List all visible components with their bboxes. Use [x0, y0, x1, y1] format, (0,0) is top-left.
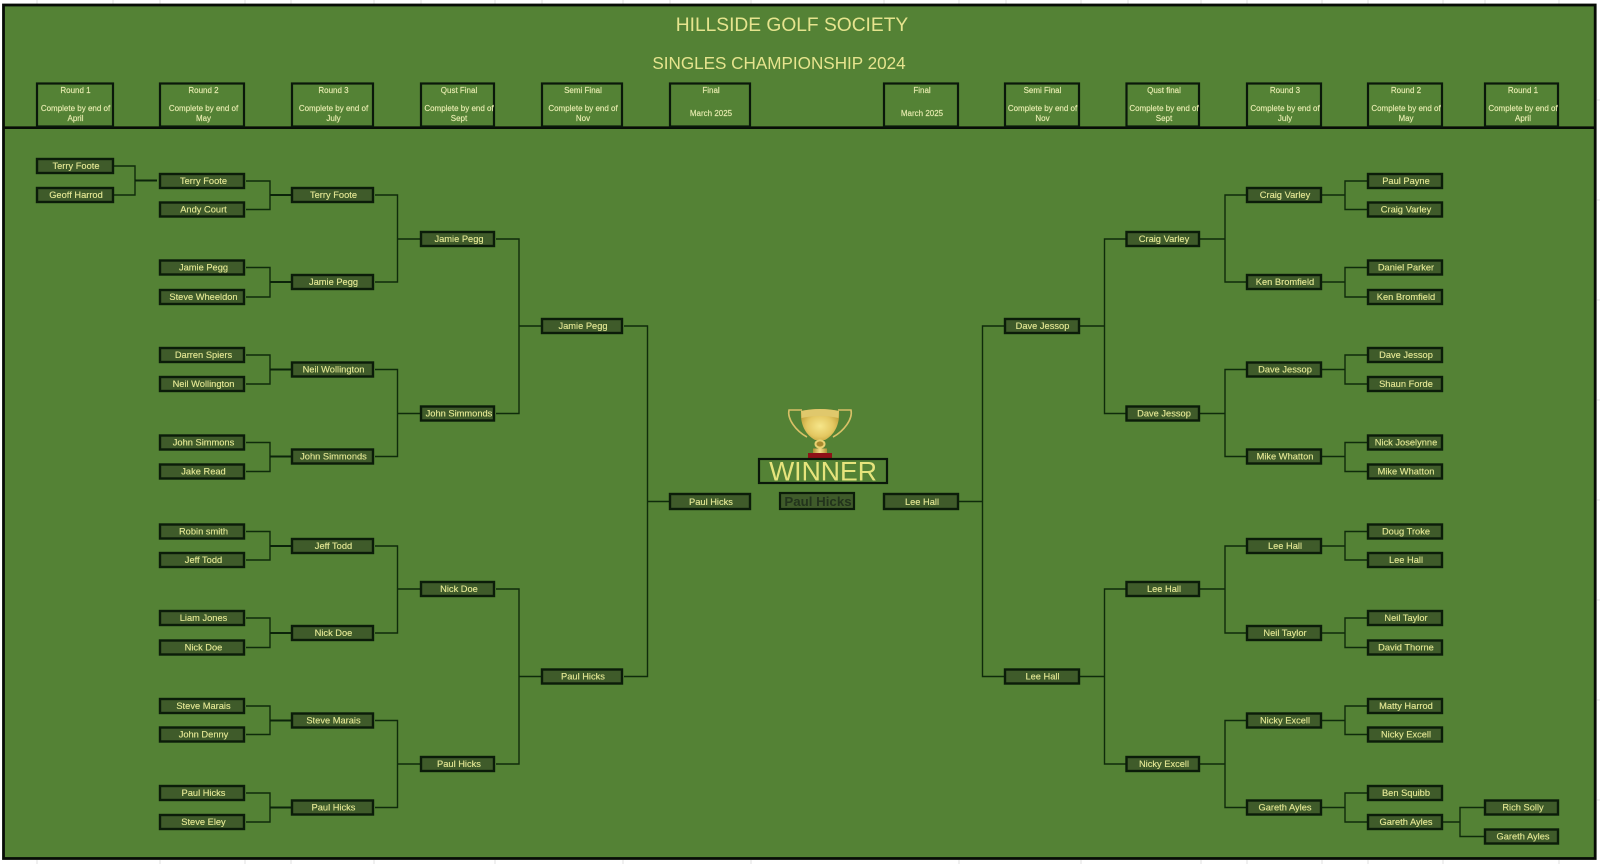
player box: [160, 786, 244, 800]
player box: Gareth Ayles: [1379, 817, 1433, 827]
right bracket: round 1: [1485, 800, 1558, 844]
player box: Andy Court: [180, 205, 227, 215]
header: left round 1: April: [67, 114, 84, 123]
player box: Dave Jessop: [1258, 365, 1312, 375]
left bracket: quarter finals: [421, 232, 494, 771]
player box: Shaun Forde: [1379, 379, 1433, 389]
player box: Steve Eley: [181, 817, 226, 827]
left bracket: round 3: [292, 188, 373, 814]
player box: Steve Marais: [176, 701, 231, 711]
header: right round 3: July: [1278, 114, 1292, 123]
header: right round 2: Complete by end of: [1371, 104, 1441, 113]
player box: [1368, 815, 1442, 829]
player box: [1368, 786, 1442, 800]
champion name box: Paul Hicks: [784, 494, 852, 509]
player box: Ken Bromfield: [1256, 277, 1314, 287]
player box: John Simmonds: [426, 409, 493, 419]
header: left round 3: Round 3: [318, 86, 349, 95]
player box: [1368, 464, 1442, 478]
player box: Neil Wollington: [303, 365, 364, 375]
right bracket: quarter finals: [1126, 232, 1199, 771]
player box: [160, 524, 244, 538]
player box: [292, 800, 373, 814]
player box: Gareth Ayles: [1258, 803, 1312, 813]
player box: [1368, 377, 1442, 391]
player box: Jamie Pegg: [558, 321, 608, 331]
header: right round 3: Complete by end of: [1250, 104, 1320, 113]
header: left quarter final: [421, 84, 494, 126]
player box: Paul Hicks: [182, 788, 226, 798]
player box: Matty Harrod: [1379, 701, 1433, 711]
header: left round 1: Round 1: [60, 86, 91, 95]
player box: [160, 464, 244, 478]
header: left semi final: [542, 84, 622, 126]
player box: Liam Jones: [180, 613, 228, 623]
player box: [1126, 757, 1199, 771]
player box: [160, 260, 244, 274]
player box: [160, 348, 244, 362]
player box: Nicky Excell: [1139, 759, 1189, 769]
header: right round 2: May: [1398, 114, 1414, 123]
player box: [160, 611, 244, 625]
player box: [1368, 553, 1442, 567]
header: right final: March 2025: [901, 109, 944, 118]
player box: [421, 406, 494, 420]
header: right semi final: Nov: [1035, 114, 1050, 123]
player box: Dave Jessop: [1016, 321, 1069, 331]
round headers: [37, 84, 1558, 126]
header: left round 2: [160, 84, 244, 126]
player box: [1368, 260, 1442, 274]
player box: [1368, 290, 1442, 304]
player box: Robin smith: [179, 527, 228, 537]
header: right quarter final: Qust final: [1147, 86, 1181, 95]
player box: Paul Hicks: [437, 759, 481, 769]
player box: [1247, 275, 1321, 289]
player box: Rich Solly: [1502, 803, 1544, 813]
player box: Terry Foote: [180, 176, 227, 186]
header: left round 2: May: [196, 114, 211, 123]
player box: [1368, 524, 1442, 538]
player box: Nick Doe: [315, 628, 352, 638]
player box: John Simmonds: [300, 452, 367, 462]
player box: [1126, 406, 1199, 420]
left bracket: semi finals: [542, 319, 622, 684]
header: right quarter final: [1126, 84, 1199, 126]
left bracket: round 2: [160, 174, 244, 829]
header: right semi final: [1005, 84, 1079, 126]
header: left round 1: [37, 84, 113, 126]
player box: Neil Taylor: [1263, 628, 1307, 638]
player box: [1368, 640, 1442, 654]
player box: [292, 626, 373, 640]
header: right round 3: [1247, 84, 1321, 126]
player box: [421, 757, 494, 771]
header: right semi final: Complete by end of: [1008, 104, 1078, 113]
player box: [1247, 539, 1321, 553]
player box: Lee Hall: [905, 497, 939, 507]
header: left quarter final: Sept: [451, 114, 468, 123]
player box: Doug Troke: [1382, 527, 1430, 537]
player box: [1126, 232, 1199, 246]
player box: Paul Hicks: [689, 497, 733, 507]
player box: [1368, 611, 1442, 625]
header: left round 1: Complete by end of: [41, 104, 111, 113]
player box: [292, 714, 373, 728]
player box: Paul Hicks: [561, 672, 605, 682]
header: left round 2: Round 2: [188, 86, 219, 95]
player box: Paul Hicks: [312, 803, 356, 813]
player box: Jamie Pegg: [434, 234, 484, 244]
player box: [1368, 436, 1442, 450]
player box: [292, 188, 373, 202]
player box: [1247, 800, 1321, 814]
right bracket: finalist: [884, 494, 958, 509]
player box: David Thorne: [1378, 643, 1434, 653]
player box: Neil Wollington: [173, 379, 234, 389]
player box: Ken Bromfield: [1377, 292, 1435, 302]
header: left quarter final: Qust Final: [441, 86, 477, 95]
header: right round 1: [1485, 84, 1558, 126]
header: left final: [670, 84, 750, 126]
player box: [1368, 174, 1442, 188]
player box: Nicky Excell: [1381, 730, 1431, 740]
player box: Mike Whatton: [1257, 452, 1313, 462]
player box: [1368, 348, 1442, 362]
player box: [160, 436, 244, 450]
header: right round 2: Round 2: [1391, 86, 1422, 95]
header: right round 3: Round 3: [1270, 86, 1301, 95]
header: right quarter final: Sept: [1156, 114, 1173, 123]
player box: [1005, 670, 1079, 684]
player box: [160, 640, 244, 654]
player box: [421, 582, 494, 596]
header: right round 1: April: [1515, 114, 1531, 123]
winner label: WINNER: [769, 456, 877, 486]
player box: [160, 377, 244, 391]
player box: [160, 728, 244, 742]
right bracket: semi finals: [1005, 319, 1079, 684]
player box: Nick Doe: [440, 584, 478, 594]
right bracket: round 3: [1247, 188, 1321, 814]
player box: Lee Hall: [1025, 672, 1060, 682]
header: right round 1: Round 1: [1508, 86, 1539, 95]
player box: [1247, 714, 1321, 728]
player box: Nick Joselynne: [1375, 438, 1437, 448]
player box: [160, 174, 244, 188]
header: right semi final: Semi Final: [1024, 86, 1062, 95]
player box: Terry Foote: [52, 161, 100, 171]
player box: Steve Wheeldon: [169, 292, 238, 302]
player box: Jeff Todd: [315, 541, 352, 551]
player box: Lee Hall: [1389, 555, 1423, 565]
header: right quarter final: Complete by end of: [1129, 104, 1199, 113]
player box: Nicky Excell: [1260, 716, 1310, 726]
right bracket: round 2: [1368, 174, 1442, 829]
player box: [292, 362, 373, 376]
player box: [292, 539, 373, 553]
header: right final: [884, 84, 958, 126]
player box: [160, 290, 244, 304]
player box: [1247, 450, 1321, 464]
player box: [542, 670, 622, 684]
header: left round 3: [292, 84, 373, 126]
player box: Mike Whatton: [1378, 467, 1434, 477]
player box: Ben Squibb: [1382, 788, 1430, 798]
player box: Nick Doe: [185, 643, 222, 653]
player box: [292, 450, 373, 464]
header: right final: Final: [913, 86, 931, 95]
title: HILLSIDE GOLF SOCIETY: [676, 15, 908, 36]
player box: [1368, 699, 1442, 713]
player box: [421, 232, 494, 246]
left bracket: round 1: [37, 159, 113, 202]
player box: Jamie Pegg: [179, 263, 228, 273]
player box: [1247, 362, 1321, 376]
player box: [1247, 626, 1321, 640]
header: right round 2: [1368, 84, 1442, 126]
player box: Craig Varley: [1260, 190, 1311, 200]
header: left semi final: Nov: [576, 114, 590, 123]
player box: [160, 202, 244, 216]
header: left round 3: Complete by end of: [299, 104, 369, 113]
player box: Jeff Todd: [185, 555, 222, 565]
player box: Craig Varley: [1381, 205, 1432, 215]
player box: Terry Foote: [310, 190, 357, 200]
player box: Gareth Ayles: [1496, 832, 1550, 842]
player box: Paul Payne: [1382, 176, 1430, 186]
player box: [542, 319, 622, 333]
player box: Neil Taylor: [1384, 613, 1428, 623]
player box: [292, 275, 373, 289]
player box: Dave Jessop: [1379, 350, 1433, 360]
icon: gold trophy: [789, 409, 851, 458]
player box: Jake Read: [181, 467, 226, 477]
player box: John Simmons: [173, 438, 235, 448]
player box: Lee Hall: [1147, 584, 1181, 594]
header: left semi final: Complete by end of: [548, 104, 618, 113]
player box: [160, 699, 244, 713]
left bracket: finalist: [670, 494, 750, 509]
header: left final: March 2025: [690, 109, 733, 118]
player box: Dave Jessop: [1137, 409, 1191, 419]
player box: Craig Varley: [1139, 234, 1190, 244]
player box: [1368, 202, 1442, 216]
player box: [160, 815, 244, 829]
player box: [160, 553, 244, 567]
header: left round 3: July: [326, 114, 341, 123]
player box: [1126, 582, 1199, 596]
bracket connectors: right side: [959, 181, 1484, 836]
player box: Geoff Harrod: [49, 190, 103, 200]
header: left final: Final: [702, 86, 720, 95]
header: left semi final: Semi Final: [564, 86, 602, 95]
player box: Lee Hall: [1268, 541, 1302, 551]
player box: Darren Spiers: [175, 350, 233, 360]
bracket connectors: left side: [114, 166, 669, 822]
player box: Daniel Parker: [1378, 263, 1434, 273]
player box: [1247, 188, 1321, 202]
player box: John Denny: [179, 730, 229, 740]
player box: [1005, 319, 1079, 333]
header: left quarter final: Complete by end of: [424, 104, 494, 113]
subtitle: SINGLES CHAMPIONSHIP 2024: [652, 54, 906, 73]
player box: Steve Marais: [306, 716, 361, 726]
header: right round 1: Complete by end of: [1488, 104, 1558, 113]
player box: [1368, 728, 1442, 742]
player box: Jamie Pegg: [309, 277, 358, 287]
header: left round 2: Complete by end of: [169, 104, 239, 113]
bracket mid connectors: left rounds 1 and 2: [135, 180, 291, 808]
